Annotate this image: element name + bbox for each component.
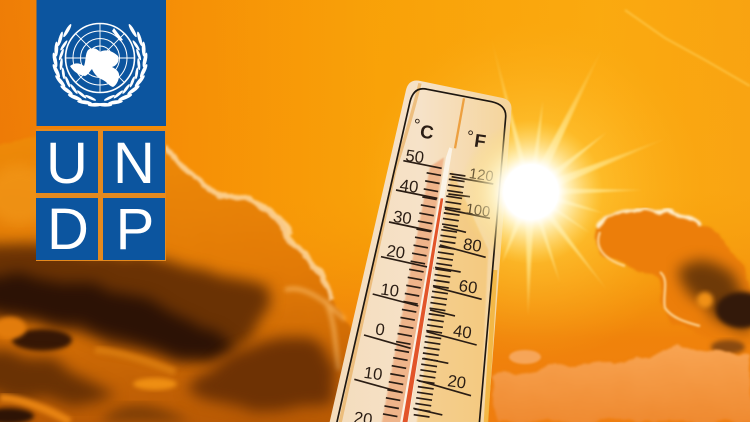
left laurel <box>51 23 103 107</box>
logo tile P: P <box>116 197 154 262</box>
fahrenheit scale labels: 100 <box>465 201 491 221</box>
tube <box>400 147 452 422</box>
fahrenheit scale labels: 20 <box>446 371 467 393</box>
thermometer board <box>329 81 511 422</box>
logo tile D: D <box>47 197 89 262</box>
tick marks right scale <box>413 174 493 420</box>
celsius scale labels: ° <box>412 115 421 135</box>
fahrenheit scale labels: 120 <box>468 166 494 185</box>
tick marks left scale <box>354 161 442 420</box>
fahrenheit scale labels: 80 <box>462 235 483 256</box>
UN emblem <box>51 23 149 107</box>
celsius scale labels: 0 <box>374 319 386 340</box>
logo tile D <box>36 197 98 262</box>
logo tile N: N <box>113 131 155 196</box>
cloud: right dark cloud <box>596 210 750 354</box>
UNDP logo <box>36 0 166 262</box>
celsius scale labels: 50 <box>404 146 425 167</box>
logo tile U <box>36 131 98 196</box>
logo emblem panel <box>36 0 166 126</box>
continents <box>70 28 123 87</box>
logo tile N <box>103 131 165 196</box>
cloud: lower right peach bank <box>493 345 750 422</box>
celsius scale labels: 30 <box>392 207 413 228</box>
celsius scale labels <box>353 115 435 422</box>
fahrenheit scale labels: ° <box>465 127 475 146</box>
wood grain and tube band <box>340 83 495 422</box>
sun <box>459 120 603 264</box>
cloud: large left storm cloud <box>0 135 350 422</box>
fahrenheit scale labels: 40 <box>452 321 473 343</box>
celsius scale labels: C <box>419 121 435 143</box>
logo tile U: U <box>46 131 88 196</box>
fahrenheit scale labels: F <box>473 130 487 152</box>
celsius scale labels: 40 <box>399 176 420 197</box>
celsius scale labels: 10 <box>363 363 384 384</box>
logo tile P <box>103 197 165 262</box>
globe <box>66 24 134 92</box>
sun rays <box>490 33 667 317</box>
right laurel <box>97 23 149 107</box>
celsius scale labels: 10 <box>379 280 400 301</box>
fahrenheit scale labels: 60 <box>458 276 479 298</box>
fahrenheit scale labels <box>446 127 494 393</box>
thermometer black outline <box>337 89 506 422</box>
celsius scale labels: 20 <box>385 241 406 263</box>
thermometer <box>329 81 511 422</box>
